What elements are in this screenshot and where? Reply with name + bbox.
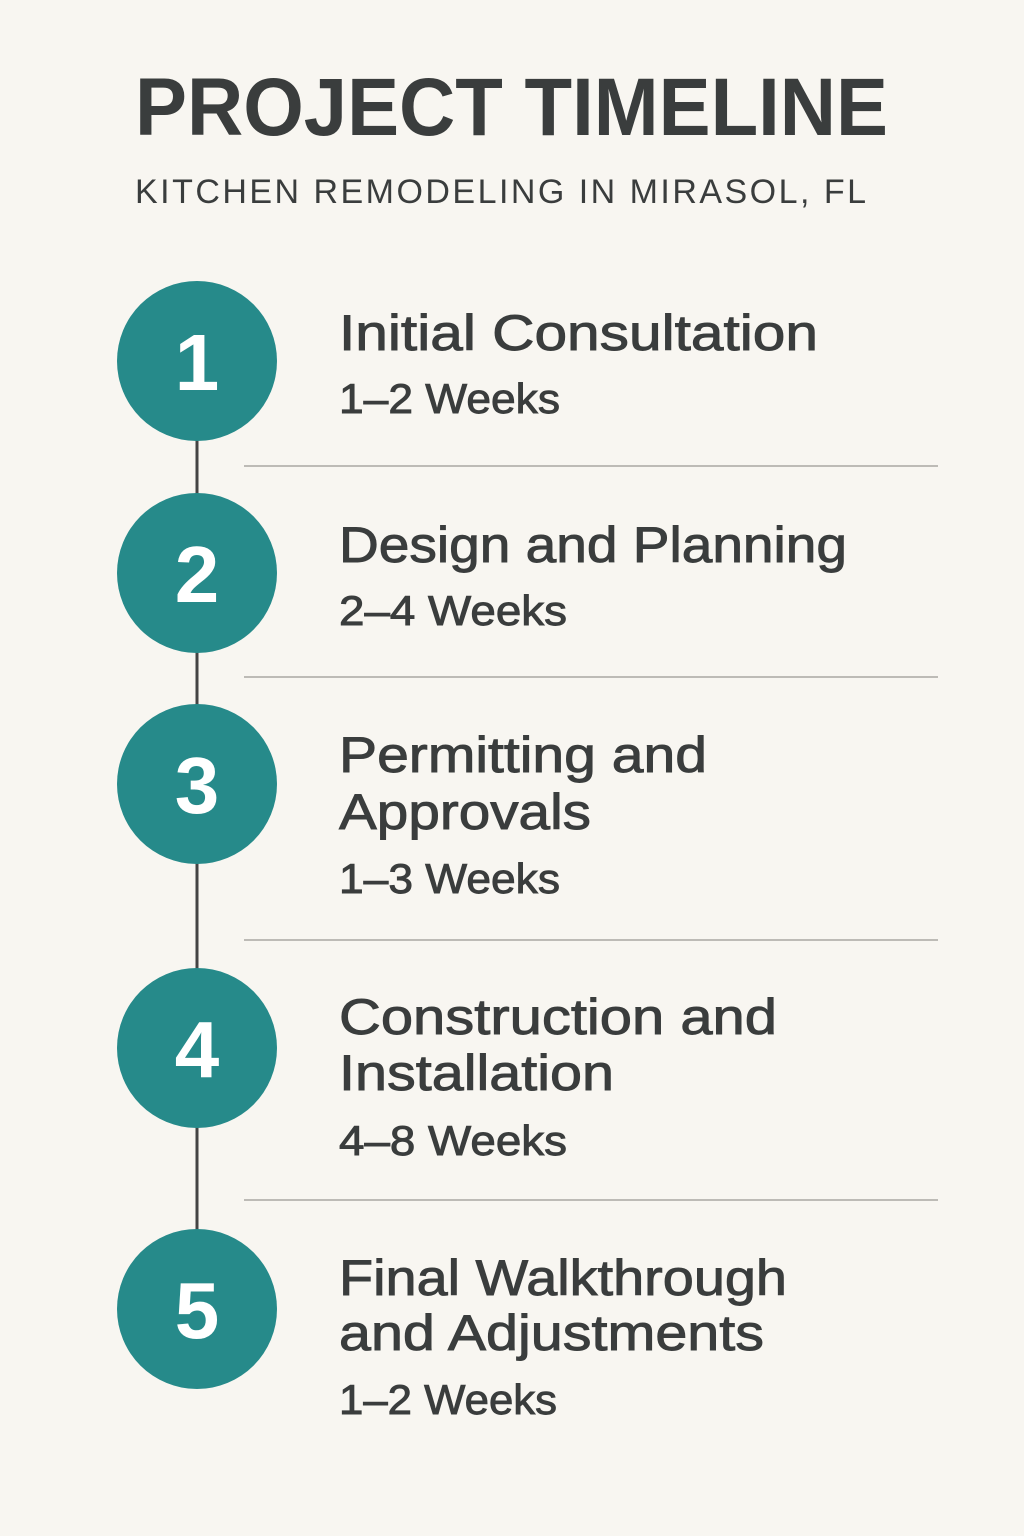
icon: circle 1: 1 xyxy=(175,318,219,407)
heading: step 4 xyxy=(339,989,777,1101)
title: PROJECT TIMELINE xyxy=(135,62,888,153)
step 4 xyxy=(117,968,777,1164)
step 2 xyxy=(117,493,847,653)
heading: step 3: Approvals xyxy=(339,784,591,840)
duration: step 2: 2–4 Weeks xyxy=(339,587,567,634)
heading: step 2: Design and Planning xyxy=(339,517,847,573)
icon: circle 2: 2 xyxy=(175,530,219,619)
heading: step 5: Final Walkthrough xyxy=(339,1250,787,1306)
heading: step 4: Construction and xyxy=(339,989,777,1045)
step 5 xyxy=(117,1229,787,1423)
icon: circle 3 xyxy=(117,704,277,864)
icon: circle 5: 5 xyxy=(175,1266,219,1355)
timeline connector line xyxy=(196,361,198,1309)
dividers xyxy=(244,466,938,1200)
duration: step 4: 4–8 Weeks xyxy=(339,1117,567,1164)
subtitle: KITCHEN REMODELING IN MIRASOL, FL xyxy=(135,173,866,211)
step 1 xyxy=(117,281,818,441)
duration: step 5: 1–2 Weeks xyxy=(339,1376,557,1423)
step 3 xyxy=(117,704,707,902)
icon: circle 1 xyxy=(117,281,277,441)
icon: circle 3: 3 xyxy=(175,741,219,830)
heading: step 1: Initial Consultation xyxy=(339,305,818,361)
duration: step 3: 1–3 Weeks xyxy=(339,855,560,902)
heading: step 3: Permitting and xyxy=(339,727,707,783)
icon: circle 5 xyxy=(117,1229,277,1389)
icon: circle 4: 4 xyxy=(175,1005,220,1094)
heading: step 5: and Adjustments xyxy=(339,1305,764,1361)
heading: step 3 xyxy=(339,727,707,840)
icon: circle 4 xyxy=(117,968,277,1128)
heading: step 5 xyxy=(339,1250,787,1361)
icon: circle 2 xyxy=(117,493,277,653)
duration: step 1: 1–2 Weeks xyxy=(339,375,560,422)
heading: step 4: Installation xyxy=(339,1045,614,1101)
